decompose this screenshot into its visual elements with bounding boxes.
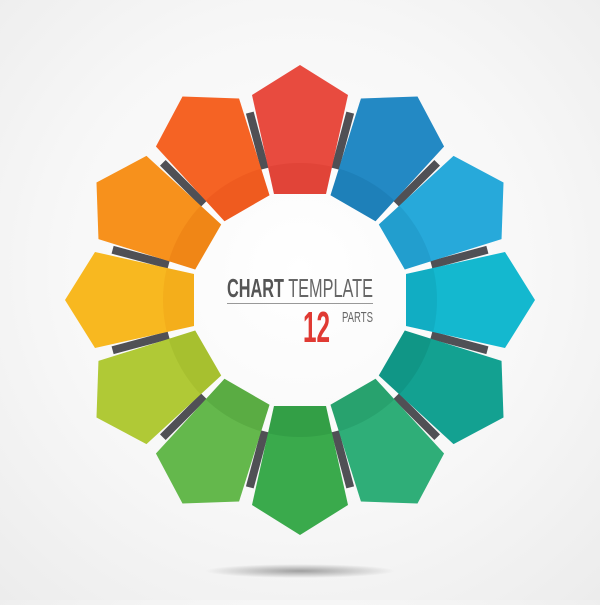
segment 1 red: [252, 65, 348, 194]
polygonal ring chart: [65, 65, 535, 535]
segment 6 sea green: [330, 378, 444, 504]
parts label: PARTS: [342, 309, 373, 326]
center title: [227, 273, 373, 352]
segment 7 green: [252, 406, 348, 535]
segment 5 teal: [378, 330, 504, 444]
segment 2 dark blue: [330, 96, 444, 222]
segment 3 blue: [378, 156, 504, 270]
segment 8 light green: [156, 378, 270, 504]
center title: CHART TEMPLATE: [227, 273, 373, 303]
segment 9 lime: [96, 330, 222, 444]
shadow: [205, 564, 395, 578]
number 12: 12: [303, 303, 330, 352]
connectors: [112, 112, 488, 488]
segment 4 cyan: [406, 252, 535, 348]
segment 11 orange: [96, 156, 222, 270]
segment 12 red-orange: [156, 96, 270, 222]
segment 10 yellow: [65, 252, 194, 348]
